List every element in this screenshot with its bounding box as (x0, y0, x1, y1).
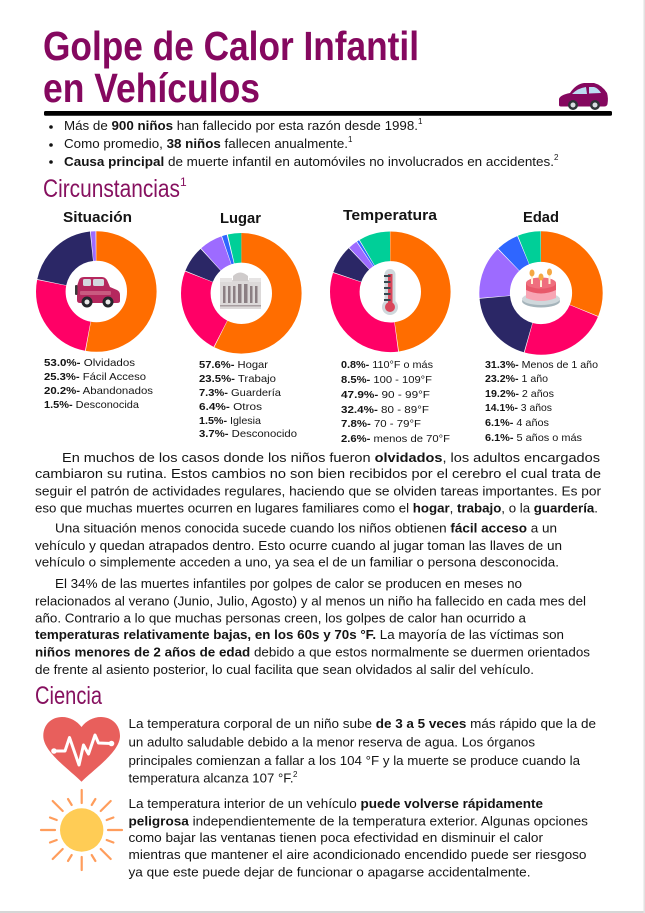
legend: lugar: 57.6%- Hogar (199, 359, 269, 371)
text block: fácil acceso: Una situación menos conocida sucede cuando los niños obtienen fácil acceso a un (55, 520, 557, 536)
text block: olvidados: En muchos de los casos donde los niños fueron olvidados , los adultos encargados (62, 450, 601, 465)
key facts list (49, 117, 559, 169)
text block: temperatura corporal (128, 716, 596, 786)
heading: temperatura: Temperatura (343, 207, 438, 224)
legend: temperatura: 2.6%- menos de 70°F (341, 433, 450, 445)
text block: fácil acceso: vehículo y quedan atrapados dentro. Esto ocurre cuando al jugar toman las llaves de un (35, 538, 562, 553)
legend: lugar: 7.3%- Guardería (199, 387, 281, 399)
donut chart: temperatura (345, 246, 436, 337)
title: en Vehículos (43, 65, 260, 111)
heading: edad: Edad (523, 209, 559, 226)
text block: fácil acceso: vehículo o simplemente acceden a uno, ya sea el de un familiar o persona desconocida. (35, 554, 559, 570)
legend: lugar: 6.4%- Otros (199, 401, 262, 413)
legend: lugar: 23.5%- Trabajo (199, 373, 276, 385)
heading: Circunstancias: 1 (180, 175, 187, 189)
key facts list: Causa principal de muerte infantil en automóviles no involucrados en accidentes. (64, 154, 554, 169)
legend: temperatura: 0.8%- 110°F o más (341, 359, 433, 371)
text block: temperatura corporal: principales comienzan a fallar a los 104 °F y la muerte se produce cuando la (128, 753, 581, 768)
icon: heart with pulse (43, 717, 120, 782)
panel: temperatura (341, 207, 450, 445)
key facts list: 1 (418, 117, 423, 126)
text block: temperatura interior: mientras que mantener el aire acondicionado encendido puede ser riesgoso (128, 847, 586, 862)
text block: olvidados (35, 450, 602, 516)
legend: situación: 53.0%- Olvidados (44, 357, 135, 369)
text block: fácil acceso (35, 520, 562, 570)
key facts list: Más de 900 niños han fallecido por esta razón desde 1998. (64, 118, 418, 133)
heading: Circunstancias: Circunstancias (43, 175, 180, 203)
donut chart: edad (495, 247, 587, 339)
panel: situación (44, 209, 153, 411)
donut chart: situación (51, 246, 142, 337)
legend: lugar: 3.7%- Desconocido (199, 428, 297, 440)
panel: lugar (196, 210, 297, 440)
icon: red car (75, 277, 120, 308)
text block: temperaturas bajas (35, 576, 591, 677)
text block: temperatura corporal: un adulto saludable debido a la menor reserva de agua. Los órganos (128, 734, 536, 750)
legend: situación: 25.3%- Fácil Acceso (44, 371, 146, 383)
legend: edad: 6.1%- 4 años (485, 417, 549, 429)
legend: edad (485, 359, 598, 444)
icon: birthday cake (522, 268, 560, 308)
legend: situación: 20.2%- Abandonados (44, 385, 153, 397)
text block: temperatura corporal: temperatura alcanza 107 °F. (128, 770, 294, 786)
icon: thermometer (382, 269, 398, 315)
panel: edad (485, 209, 598, 444)
legend: temperatura: 32.4%- 80 - 89°F (341, 404, 429, 416)
title: Golpe de Calor Infantil (43, 23, 419, 69)
legend: edad: 14.1%- 3 años (485, 402, 552, 414)
key facts list: 2 (554, 153, 559, 162)
legend: edad: 19.2%- 2 años (485, 388, 554, 400)
heading: Ciencia: Ciencia (35, 682, 102, 710)
text block: olvidados: cambiaron su rutina. Estos cambios no son bien recibidos por el cerebro el cual trata de (35, 466, 601, 481)
legend: temperatura: 47.9%- 90 - 99°F (341, 389, 430, 401)
key facts list: Como promedio, 38 niños fallecen anualmente. (64, 136, 348, 151)
title (43, 23, 419, 111)
text block: temperatura interior: peligrosa independientemente de la temperatura exterior. Algunas opciones (128, 814, 589, 828)
text block: temperaturas bajas: año. Contrario a lo que muchas personas creen, los golpes de calor han ocurrido a (35, 610, 527, 626)
text block: temperatura interior: ya que este puede dejar de funcionar o apagarse accidentalmente. (128, 864, 530, 880)
icon: sun (41, 790, 122, 870)
legend: temperatura: 8.5%- 100 - 109°F (341, 374, 432, 386)
text block: temperaturas bajas: de frente al asiento posterior, lo cual facilita que sean olvidados al salir del vehículo. (35, 662, 534, 677)
text block: olvidados: seguir el patrón de actividades regulares, haciendo que se olviden tareas importantes. Es por (35, 484, 602, 498)
legend: edad: 23.2%- 1 año (485, 373, 548, 385)
donut chart: lugar (196, 248, 287, 339)
text block: olvidados: eso que muchas muertes ocurren en lugares familiares como el hogar, trabajo, o la guardería. (35, 500, 598, 516)
legend: temperatura: 7.8%- 70 - 79°F (341, 418, 421, 430)
heading: lugar: Lugar (220, 210, 261, 227)
legend: lugar: 1.5%- Iglesia (199, 415, 261, 427)
key facts list: 1 (348, 135, 353, 144)
legend: situación: 1.5%- Desconocida (44, 399, 139, 411)
legend: edad: 6.1%- 5 años o más (485, 432, 582, 444)
legend: situación (44, 357, 153, 411)
text block: temperaturas bajas: El 34% de las muertes infantiles por golpes de calor se producen en meses no (55, 576, 522, 591)
text block: temperaturas bajas: niños menores de 2 años de edad debido a que estos normalmente se duermen orientados (35, 644, 591, 660)
text block: temperatura interior (128, 796, 589, 880)
title rule (44, 111, 612, 116)
text block: temperatura interior: La temperatura interior de un vehículo puede volverse rápidamente (128, 796, 543, 811)
legend: lugar (199, 359, 297, 440)
text block: temperatura corporal: 2 (293, 770, 298, 779)
icon: building (220, 272, 261, 309)
text block: temperaturas bajas: temperaturas relativamente bajas, en los 60s y 70s °F. La mayoría de las víctimas son (35, 627, 564, 642)
text block: temperatura corporal: La temperatura corporal de un niño sube de 3 a 5 veces más rápido que la de (128, 716, 596, 731)
legend: edad: 31.3%- Menos de 1 año (485, 359, 598, 371)
icon: title car (559, 83, 608, 110)
text block: temperatura interior: como bajar las ventanas tienen poca efectividad en disminuir el calor (128, 830, 544, 845)
heading: situación: Situación (63, 209, 132, 226)
text block: temperaturas bajas: relacionados al verano (Junio, Julio, Agosto) y al menos un niño ha fallecido en cada mes del (35, 594, 586, 608)
legend: temperatura (341, 359, 450, 445)
